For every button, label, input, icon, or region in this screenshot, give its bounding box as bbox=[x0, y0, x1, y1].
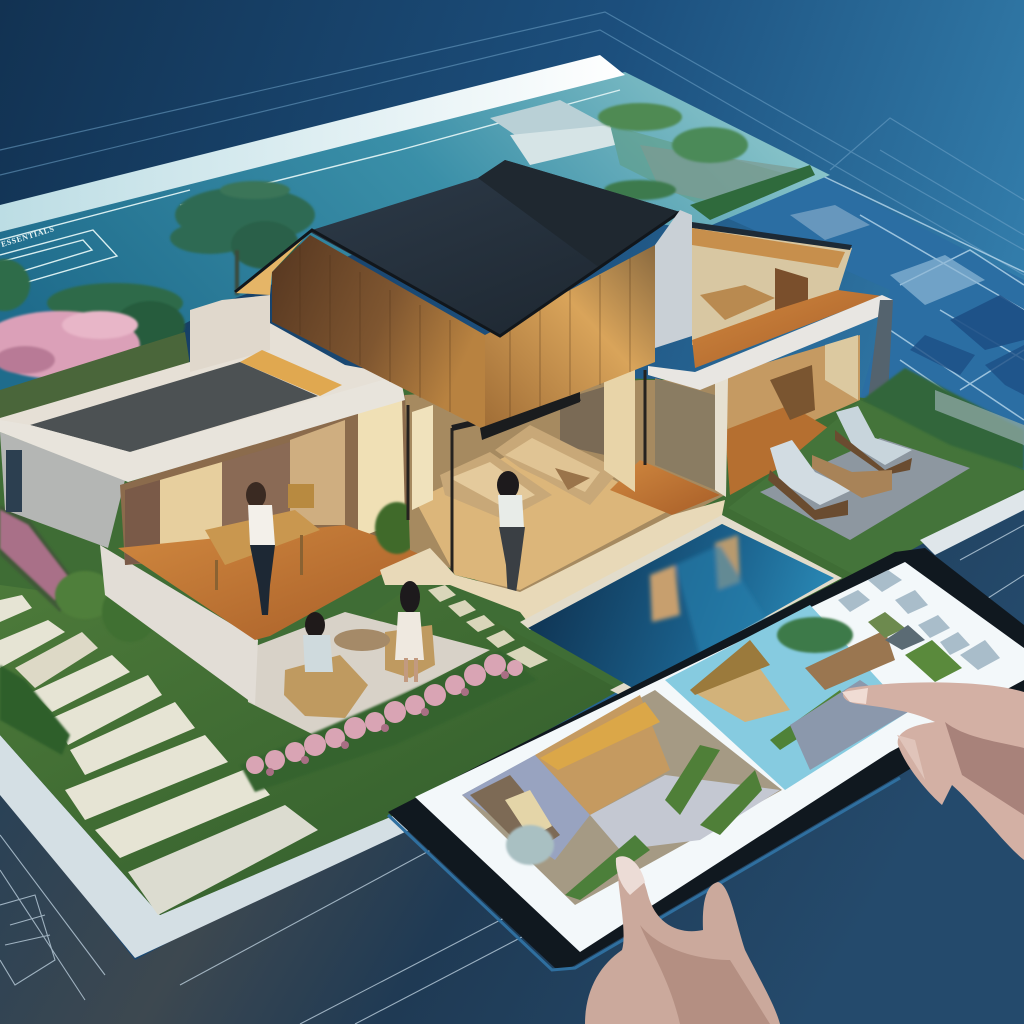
upper room slab bbox=[648, 295, 893, 390]
lower right room bbox=[715, 335, 860, 497]
roof light glow bbox=[240, 350, 342, 396]
hand: holding hand, bottom bbox=[585, 856, 780, 1024]
tablet: side edge bbox=[388, 778, 900, 970]
tree: pink blossom bbox=[0, 311, 140, 379]
desk surface bbox=[0, 490, 1024, 1024]
tablet: body bbox=[388, 548, 1024, 968]
white column bbox=[655, 210, 692, 348]
background house in print bbox=[490, 100, 815, 220]
lawn: front bbox=[0, 580, 620, 915]
plants: right border bbox=[862, 368, 1024, 470]
pool reflection bbox=[650, 535, 770, 655]
sheet: printed outline and label bbox=[0, 90, 620, 290]
lawn white edge bbox=[920, 490, 1024, 555]
sheet: printed outline and label: ESSENTIALS bbox=[0, 224, 56, 249]
person: woman on terrace bbox=[497, 471, 525, 600]
flower bed bbox=[240, 650, 537, 792]
left wing exterior wall bbox=[0, 432, 125, 548]
pool coping bbox=[520, 515, 842, 695]
tablet: swatch column bbox=[838, 570, 1000, 682]
left wing: flat roof parapet bbox=[190, 295, 270, 372]
gable lit soffit bbox=[235, 232, 310, 295]
hedge: back left bbox=[0, 332, 190, 425]
low white wall bbox=[100, 545, 258, 705]
sheet: landscape sky print bbox=[0, 72, 830, 420]
tablet: photo left bbox=[462, 690, 782, 905]
tablet: photo right bbox=[665, 605, 908, 790]
main room interior bbox=[405, 380, 725, 600]
main roof bbox=[235, 160, 680, 336]
shrubs by wall bbox=[55, 571, 158, 642]
dining table bbox=[205, 484, 320, 590]
sheet: bottom edge bbox=[0, 735, 420, 958]
tablet bbox=[388, 548, 1024, 970]
tablet: screen bbox=[415, 562, 1024, 952]
blueprint lines: bottom left bbox=[0, 525, 1024, 1024]
dining room glass and curtains bbox=[125, 398, 405, 565]
trees: left backdrop bbox=[0, 259, 185, 349]
stone wall bbox=[560, 385, 610, 455]
lawn: right bbox=[728, 400, 1024, 578]
lounger: right bbox=[835, 406, 912, 475]
tree: centre left bbox=[170, 181, 315, 295]
blueprint sheet: right side plan bbox=[720, 170, 1024, 500]
left wing: flat roof bbox=[30, 362, 318, 452]
living room sofa bbox=[440, 425, 620, 520]
person: standing woman on patio bbox=[334, 581, 435, 682]
side table bbox=[812, 455, 892, 498]
dining room interior bbox=[120, 395, 410, 565]
main building: wood wall right bbox=[485, 245, 655, 430]
upper right room bbox=[692, 222, 882, 368]
fence bbox=[935, 390, 1024, 445]
person: seated woman bbox=[284, 612, 368, 718]
main living floor bbox=[415, 440, 670, 590]
hand: pointing hand, right bbox=[842, 682, 1024, 860]
patio stepping path bbox=[428, 585, 548, 668]
sheet: white top edge bbox=[0, 55, 625, 232]
main building: wood wall left bbox=[272, 235, 485, 430]
plant: potted bbox=[375, 502, 419, 554]
patio bbox=[245, 612, 490, 738]
lounger: left bbox=[768, 440, 852, 520]
pool deck bbox=[760, 438, 970, 540]
dining floor bbox=[118, 525, 422, 640]
left wing: rear ledge bbox=[0, 322, 400, 452]
path: stepping stones bbox=[0, 595, 318, 915]
dark beam under wood bbox=[480, 392, 580, 440]
curtains and frames bbox=[408, 345, 645, 575]
person: standing woman in dining room bbox=[246, 482, 275, 615]
hedge: left border bbox=[0, 505, 78, 755]
site base under lawn and house bbox=[0, 375, 1024, 915]
blueprint lines: back bbox=[0, 12, 1024, 275]
pool bbox=[528, 524, 834, 690]
terrace deck steps bbox=[380, 500, 725, 625]
left wing: fascia bbox=[0, 375, 405, 482]
wood slats bbox=[300, 245, 630, 420]
